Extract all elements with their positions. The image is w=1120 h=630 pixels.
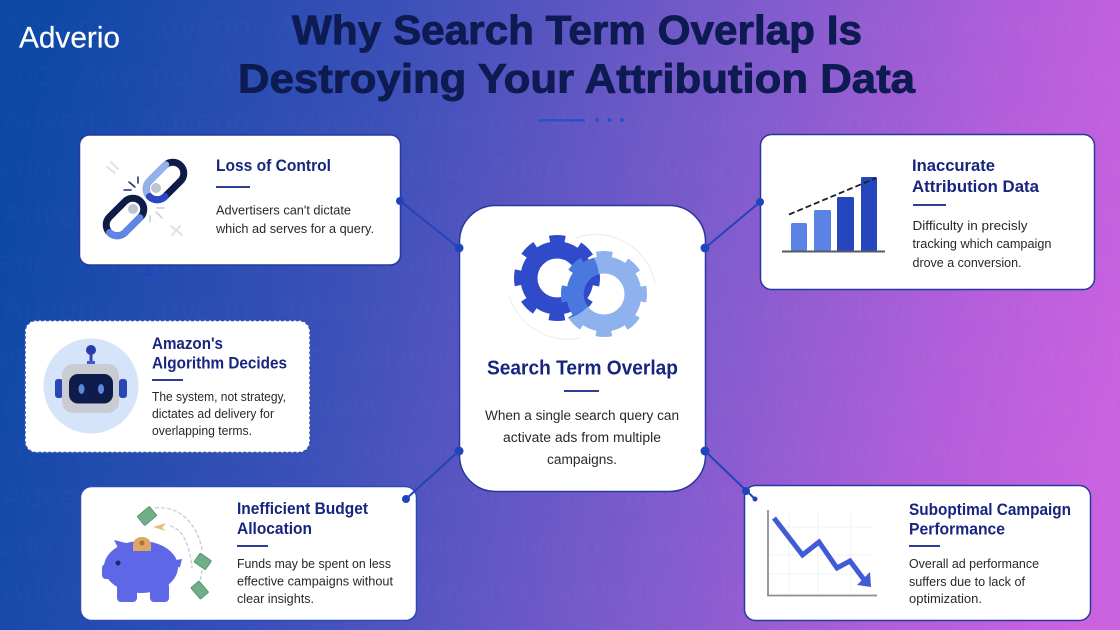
panel: loss of control [80, 135, 400, 265]
title [238, 7, 916, 102]
body text: tracking which campaign [912, 237, 1052, 251]
body text [485, 408, 679, 467]
heading: Inefficient Budget [237, 499, 368, 518]
heading: Algorithm Decides [152, 354, 287, 372]
heading [152, 334, 287, 372]
connector: loss of control to centre [396, 197, 464, 252]
heading [237, 499, 368, 538]
heading [909, 500, 1071, 538]
dark gear [512, 233, 602, 323]
heading: Amazon's [152, 334, 223, 353]
panel: inaccurate attribution data [760, 134, 1094, 290]
body text: Overall ad performance [909, 557, 1039, 571]
heading: Inaccurate [912, 156, 995, 175]
body text: activate ads from multiple [503, 430, 661, 445]
heading: Search Term Overlap [487, 358, 678, 380]
body text: The system, not strategy, [152, 390, 286, 404]
panel: suboptimal campaign performance [744, 486, 1090, 620]
title: Destroying Your Attribution Data [238, 56, 916, 102]
body text [152, 390, 286, 438]
body text: clear insights. [237, 592, 314, 606]
body text: suffers due to lack of [909, 575, 1026, 589]
connector: budget allocation to centre [402, 446, 464, 503]
body text: optimization. [909, 592, 982, 606]
body text: dictates ad delivery for [152, 407, 274, 421]
title divider [538, 118, 624, 122]
body text: When a single search query can [485, 408, 679, 423]
icon: broken chain [102, 158, 188, 240]
connector: campaign performance to centre [700, 446, 758, 502]
light gear [559, 249, 649, 339]
body text: drove a conversion. [912, 256, 1022, 270]
body text: Difficulty in precisly [912, 219, 1028, 233]
body text [215, 204, 374, 236]
panel: search term overlap (centre) [460, 206, 706, 492]
gear overlap [561, 258, 599, 318]
body text [912, 219, 1052, 270]
body text: Advertisers can't dictate [216, 204, 351, 218]
title: Why Search Term Overlap Is [292, 7, 862, 53]
body text: campaigns. [547, 452, 617, 467]
body text: which ad serves for a query. [215, 222, 374, 236]
body text: overlapping terms. [152, 424, 252, 438]
dashed arrow: algorithm to loss of control [143, 267, 153, 320]
body text: Funds may be spent on less [237, 557, 391, 571]
logo: Adverio [19, 22, 120, 54]
panel: amazon's algorithm decides [25, 320, 310, 452]
body text [909, 557, 1039, 606]
heading: Performance [909, 520, 1005, 538]
icon: bar chart [782, 177, 885, 252]
heading: Allocation [237, 519, 312, 538]
heading: Attribution Data [912, 177, 1040, 196]
body text [237, 557, 394, 606]
heading: Loss of Control [216, 156, 331, 175]
connector: inaccurate attribution to centre [700, 198, 764, 252]
body text: effective campaigns without [237, 574, 394, 588]
heading [912, 156, 1040, 196]
icon: declining line chart [768, 510, 877, 596]
icon: robot [44, 338, 138, 434]
icon: piggy bank [102, 506, 212, 602]
panel: inefficient budget allocation [80, 486, 416, 620]
heading: Suboptimal Campaign [909, 500, 1071, 519]
icon: overlapping gears [509, 233, 655, 339]
